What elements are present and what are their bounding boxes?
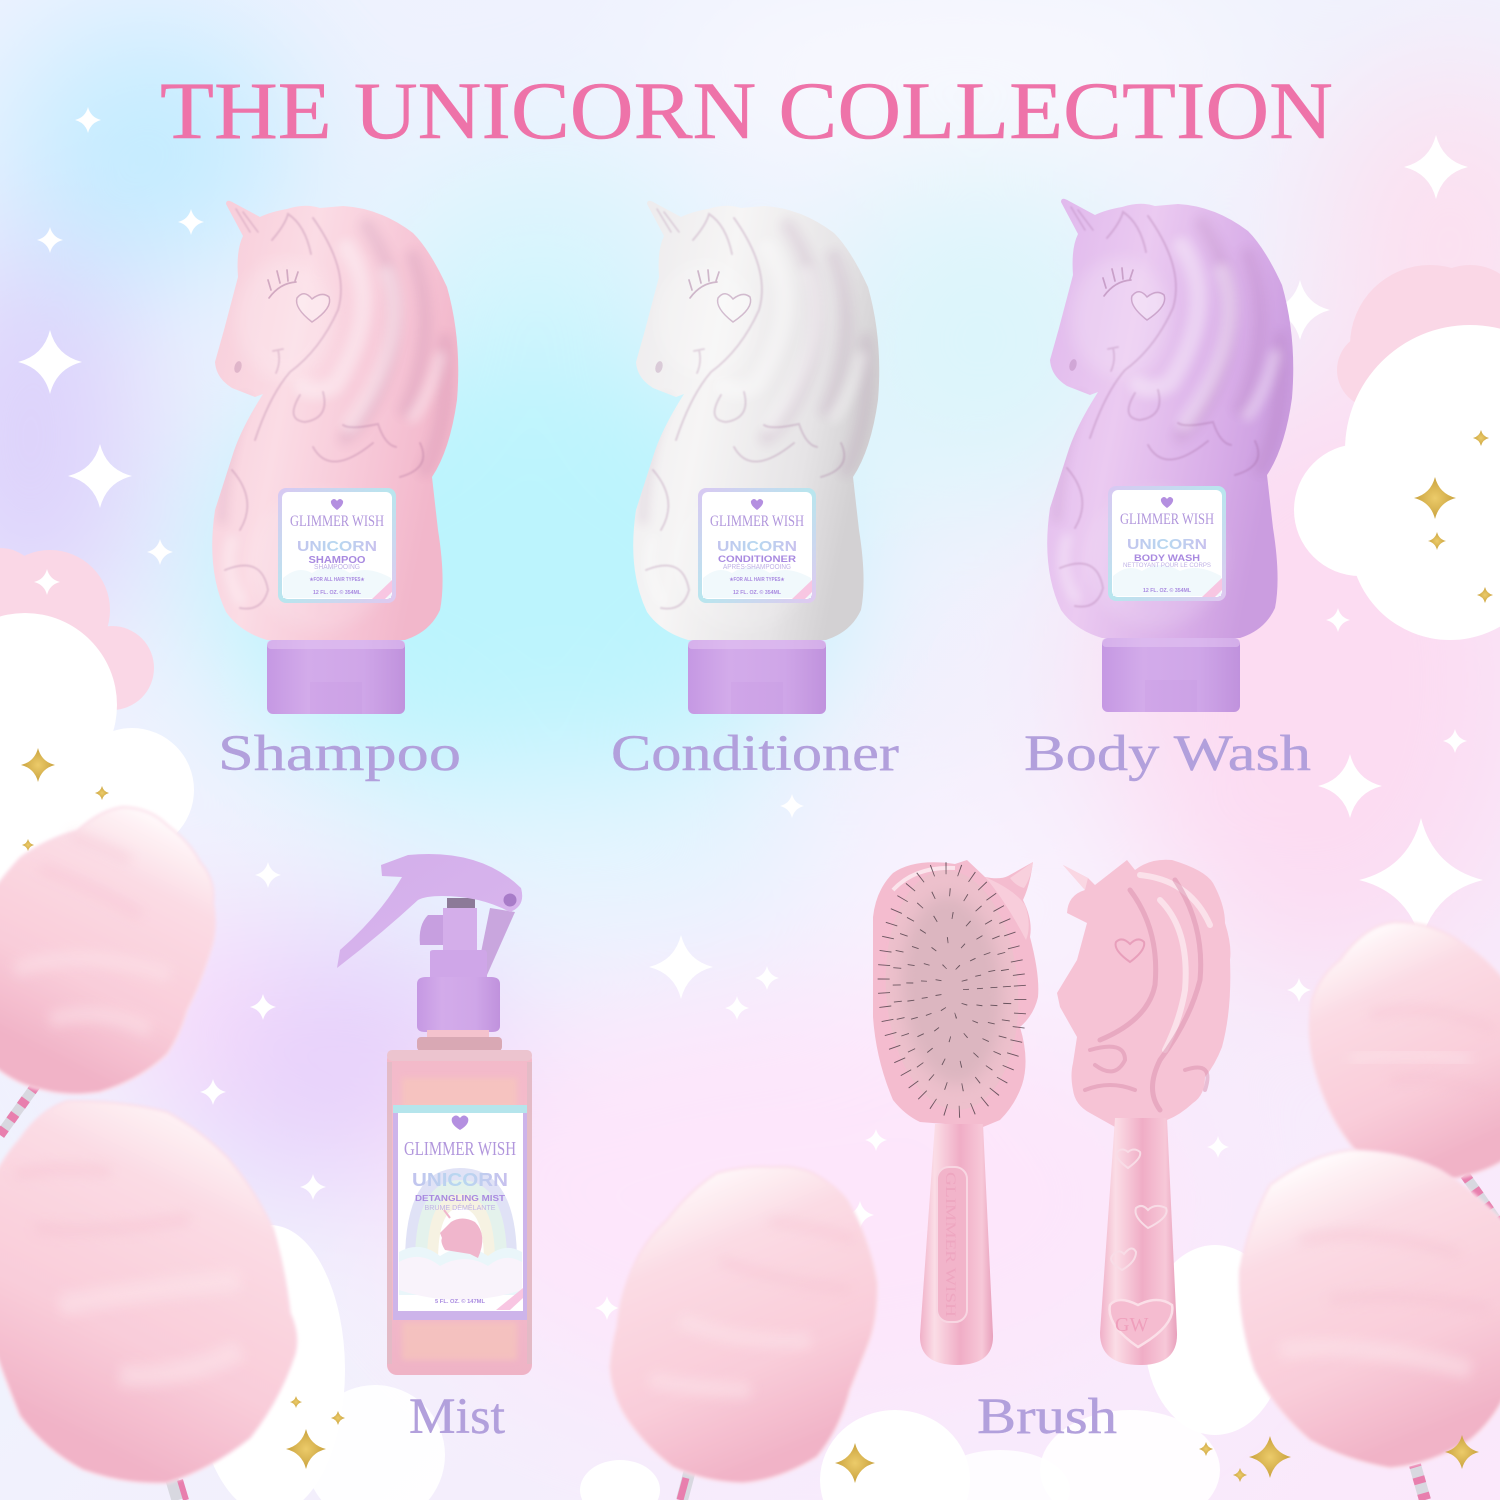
cotton candy: upper left <box>0 807 215 1094</box>
label: mist: BRUME DÉMÊLANTE <box>424 1203 496 1212</box>
product name: brush: Brush <box>977 1389 1117 1445</box>
label: body wash: BODY WASH <box>1134 553 1200 563</box>
sprayer head <box>337 854 522 1032</box>
label: mist <box>393 1105 527 1320</box>
product: shampoo bottle <box>212 201 458 714</box>
label: body wash <box>1108 486 1226 601</box>
gold sparkles <box>21 430 1493 1483</box>
label: mist: GLIMMER WISH <box>404 1138 516 1160</box>
product name: mist: Mist <box>409 1389 505 1445</box>
label: shampoo: UNICORN <box>297 538 377 555</box>
cotton candy: bottom centre <box>610 1167 877 1483</box>
label: mist: 5 FL. OZ. © 147ML <box>435 1298 486 1305</box>
label: conditioner <box>698 488 816 603</box>
label: body wash: UNICORN <box>1127 536 1207 553</box>
product: brush, unicorn side <box>1057 860 1230 1365</box>
cotton candy sticks <box>0 1085 1500 1500</box>
label: shampoo: ★FOR ALL HAIR TYPES★ <box>310 577 365 583</box>
cotton candy: upper right <box>1310 922 1500 1185</box>
label: conditioner: GLIMMER WISH <box>710 513 804 530</box>
label: conditioner: 12 FL. OZ. © 354ML <box>733 589 781 596</box>
label: mist: DETANGLING MIST <box>415 1193 506 1203</box>
label: shampoo: SHAMPOOING <box>314 564 360 571</box>
product: detangling mist bottle <box>337 854 532 1375</box>
label: shampoo: SHAMPOO <box>308 555 366 566</box>
white sparkles <box>18 107 1483 1320</box>
title: THE UNICORN COLLECTION <box>160 65 1333 156</box>
label: body wash: 12 FL. OZ. © 354ML <box>1143 587 1191 594</box>
label: conditioner: APRÈS-SHAMPOOING <box>723 562 791 571</box>
glass bottle <box>387 1030 532 1375</box>
label: conditioner: CONDITIONER <box>718 554 797 564</box>
label: conditioner: UNICORN <box>717 538 797 555</box>
cotton candy: lower left <box>0 1101 297 1483</box>
product: brush, unicorn side: GW <box>1115 1314 1148 1336</box>
product: brush, bristle side <box>873 860 1038 1365</box>
product: body wash bottle <box>1047 199 1293 712</box>
product name: conditioner: Conditioner <box>611 726 899 782</box>
clouds: pink behind left and right <box>0 265 1500 710</box>
label: conditioner: ★FOR ALL HAIR TYPES★ <box>730 577 785 583</box>
label: body wash: NETTOYANT POUR LE CORPS <box>1123 562 1212 569</box>
product: conditioner bottle <box>633 201 879 714</box>
clouds: white <box>0 325 1500 1500</box>
label: shampoo: GLIMMER WISH <box>290 513 384 530</box>
product: brush, bristle side: GLIMMER WISH <box>942 1172 958 1317</box>
label: shampoo <box>278 488 396 603</box>
cotton candy: lower right <box>1240 1150 1500 1468</box>
label: mist: UNICORN <box>412 1170 508 1190</box>
label: shampoo: 12 FL. OZ. © 354ML <box>313 589 361 596</box>
product name: body wash: Body Wash <box>1024 726 1311 782</box>
bristle pad <box>876 864 1028 1116</box>
label: body wash: GLIMMER WISH <box>1120 511 1214 528</box>
product name: shampoo: Shampoo <box>218 726 461 782</box>
